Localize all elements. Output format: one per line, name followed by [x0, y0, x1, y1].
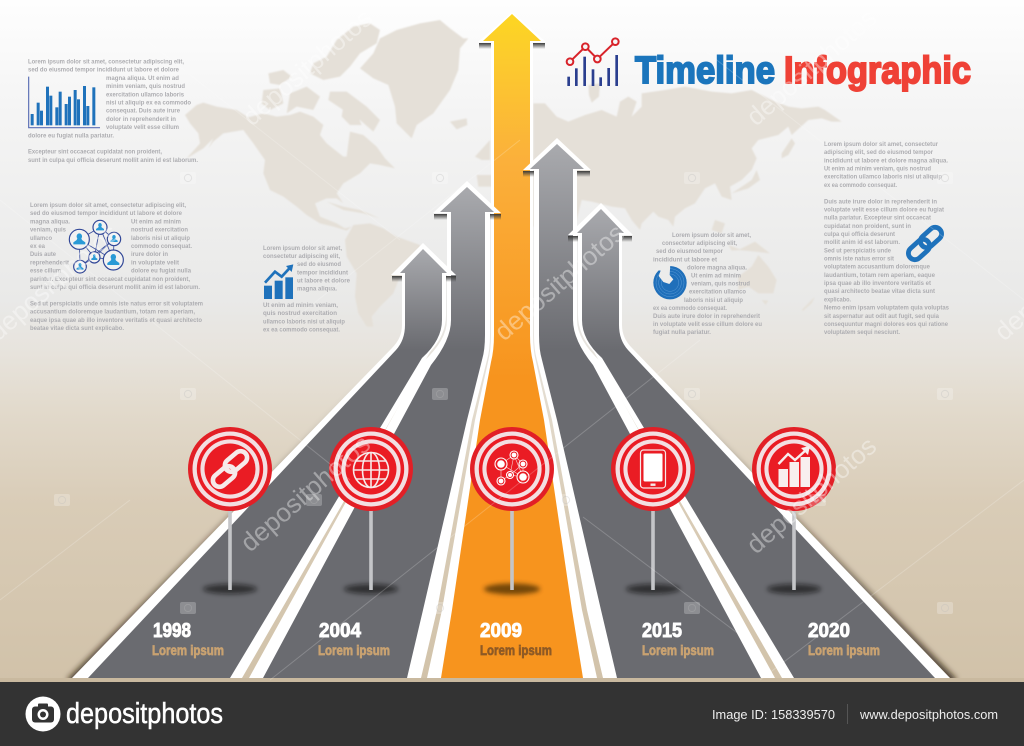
text block: top left: dolor in reprehenderit in: [106, 116, 176, 123]
pole shadow: [767, 584, 821, 594]
text block: right: culpa qui officia deserunt: [824, 231, 896, 238]
watermark: depositphotos: [740, 431, 882, 560]
watermark: depositphotos: [740, 3, 882, 132]
text block: top left: consequat. Duis aute irure: [106, 108, 180, 115]
text block: center left: [263, 245, 350, 334]
text block: middle left: dolore eu fugiat nulla: [131, 268, 191, 275]
text block: top left: minim veniam, quis nostrud: [106, 83, 185, 90]
text block: right: adipiscing elit, sed do eiusmod tempor: [824, 149, 934, 156]
text block: right: sit aspernatur aut odit aut fugit, sed quia: [824, 313, 939, 320]
text block: center left: tempor incididunt: [297, 269, 349, 276]
text block: right: [824, 141, 949, 336]
text block: center right: dolore magna aliqua.: [687, 264, 747, 271]
text block: right: omnis iste natus error sit: [824, 256, 895, 262]
year label 2009: [480, 620, 552, 658]
text block: top left: voluptate velit esse cillum: [106, 124, 179, 131]
text block: center left: ullamco laboris nisi ut aliquip: [263, 318, 345, 325]
text block: center right: exercitation ullamco: [689, 289, 746, 296]
text block: right: incididunt ut labore et dolore magna aliqua.: [824, 157, 948, 164]
text block: center left: consectetur adipiscing elit,: [263, 253, 340, 260]
text block: middle left: Lorem ipsum dolor sit amet, consectetur adipiscing elit,: [30, 202, 186, 209]
pole: [510, 509, 514, 590]
footer bar: [0, 682, 1024, 746]
text block: center right: [653, 232, 762, 336]
text block: middle left: accusantium doloremque laudantium, totam rem aperiam,: [30, 309, 195, 316]
icon: bar chart: [29, 77, 100, 128]
text block: middle left: nostrud exercitation: [131, 227, 188, 234]
text block: right: exercitation ullamco laboris nisi ut aliquip: [824, 174, 942, 181]
text block: middle left: magna aliqua.: [30, 218, 70, 225]
text block: top left: Lorem ipsum dolor sit amet, consectetur adipiscing elit,: [28, 58, 184, 66]
text block: center right: ex ea commodo consequat.: [653, 305, 727, 312]
text block: middle left: beatae vitae dicta sunt explicabo.: [30, 325, 124, 332]
pole shadow: [484, 584, 540, 594]
world map: [185, 20, 842, 327]
icon: chain link: [210, 448, 250, 490]
text block: right: Sed ut perspiciatis unde: [824, 247, 891, 254]
site url: www.depositphotos.com: [859, 707, 998, 722]
text block: right: laudantium, totam rem aperiam, eaque: [824, 272, 935, 279]
title: Infographic: [784, 50, 971, 92]
road 4: grey arrow: [523, 138, 775, 678]
title icon: line and bar chart: [567, 38, 619, 86]
text block: center right: fugiat nulla pariatur.: [653, 329, 711, 336]
text block: center right: consectetur adipiscing elit,: [662, 240, 737, 247]
text block: center left: magna aliqua.: [297, 286, 337, 292]
text block: middle left: [30, 202, 203, 332]
watermark: depositphotos: [488, 218, 630, 347]
text block: middle left: sunt in culpa qui officia deserunt mollit anim id est laborum.: [30, 284, 200, 291]
road 5: grey arrow: [568, 203, 950, 678]
text block: middle left: in voluptate velit: [131, 259, 180, 266]
icon: tablet: [640, 450, 666, 488]
text block: right: Nemo enim ipsam voluptatem quia voluptas: [824, 305, 949, 312]
year label 2015: Lorem ipsum: [642, 642, 714, 658]
year label 2020: Lorem ipsum: [808, 642, 880, 658]
year label 1998: [152, 620, 224, 658]
text block: middle left: sed do eiusmod tempor incididunt ut labore et dolore: [30, 210, 182, 217]
pole: [792, 509, 796, 590]
text block: right: consequuntur magni dolores eos qui ratione: [824, 321, 948, 328]
year label 2004: [318, 620, 390, 658]
year label 2009: Lorem ipsum: [480, 642, 552, 658]
road 2: grey arrow: [249, 181, 501, 678]
text block: top left: sed do eiusmod tempor incididunt ut labore et dolore: [28, 67, 179, 74]
text block: center left: ex ea commodo consequat.: [263, 327, 340, 334]
road side shadows: [64, 414, 960, 678]
text block: right: nulla pariatur. Excepteur sint occaecat: [824, 215, 932, 222]
title: Timeline: [635, 50, 775, 92]
text block: right: voluptate velit esse cillum dolore eu fugiat: [824, 206, 945, 213]
text block: right: Duis aute irure dolor in reprehenderit in: [824, 198, 937, 205]
sign disc: [329, 427, 413, 511]
road bottom edge: [0, 678, 1024, 682]
text block: middle left: Ut enim ad minim: [131, 218, 181, 225]
sign disc: [188, 427, 272, 511]
image id: Image ID: 158339570: [712, 707, 835, 722]
americas and greenland: [185, 20, 492, 327]
text block: middle left: eaque ipsa quae ab illo inventore veritatis et quasi architecto: [30, 317, 202, 324]
text block: center right: in voluptate velit esse cillum dolore eu: [653, 321, 762, 328]
pole: [369, 509, 373, 590]
text block: center right: Lorem ipsum dolor sit amet,: [672, 232, 751, 239]
watermark: depositphotos: [236, 3, 378, 132]
watermark: depositphotos: [234, 429, 376, 558]
text block: middle left: ullamco: [30, 235, 52, 242]
text block: center left: Lorem ipsum dolor sit amet,: [263, 245, 342, 252]
year label 1998: 1998: [153, 620, 191, 642]
text block: center left: quis nostrud exercitation: [263, 310, 337, 317]
text block: center right: veniam, quis nostrud: [691, 281, 750, 288]
pole shadow: [626, 584, 680, 594]
text block: top left: sunt in culpa qui officia deserunt mollit anim id est laborum.: [28, 157, 198, 164]
text block: center left: sed do eiusmod: [297, 261, 341, 268]
sign 2: globe: [329, 427, 413, 594]
text block: middle left: ex ea: [30, 243, 45, 250]
icon: growth bars: [264, 264, 293, 299]
pole: [651, 509, 655, 590]
footer logo icon: [26, 696, 60, 732]
pole: [228, 509, 232, 590]
text block: right: ipsa quae ab illo inventore veritatis et: [824, 280, 932, 287]
sign 1: link: [188, 427, 272, 594]
text block: top left: Excepteur sint occaecat cupidatat non proident,: [28, 149, 162, 156]
footer logo text: depositphotos: [66, 698, 223, 730]
text block: center right: incididunt ut labore et: [653, 256, 718, 263]
icon: globe: [354, 452, 388, 488]
icon: bars and rising arrow: [778, 446, 810, 487]
text block: middle left: irure dolor in: [131, 251, 168, 258]
year label 2020: [808, 620, 880, 658]
year label 1998: Lorem ipsum: [152, 642, 224, 658]
year label 2004: 2004: [319, 620, 362, 642]
text block: top left: nisi ut aliquip ex ea commodo: [106, 100, 191, 106]
sign 5: growth chart: [752, 427, 836, 594]
text block: middle left: commodo consequat.: [131, 243, 192, 250]
eurasia and australia: [533, 83, 842, 311]
icon: radial chart: [653, 263, 687, 299]
text block: top left: exercitation ullamco laboris: [106, 91, 184, 98]
sign 4: tablet: [611, 427, 695, 594]
text block: middle left: laboris nisi ut aliquip: [131, 235, 190, 242]
pole shadow: [344, 584, 398, 594]
road 1: grey arrow: [72, 243, 456, 678]
text block: right: mollit anim id est laborum.: [824, 239, 900, 246]
text block: right: ex ea commodo consequat.: [824, 182, 897, 189]
year label 2020: 2020: [808, 620, 850, 642]
text block: middle left: veniam, quis: [30, 227, 66, 234]
pole shadow: [203, 584, 257, 594]
text block: middle left: esse cillum: [30, 268, 61, 275]
icon: blue chain link: [906, 225, 944, 262]
text block: center right: Duis aute irure dolor in reprehenderit: [653, 313, 761, 320]
text block: middle left: reprehenderit: [30, 259, 70, 266]
sign disc: [611, 427, 695, 511]
sign disc: [752, 427, 836, 511]
text block: middle left: Sed ut perspiciatis unde omnis iste natus error sit voluptatem: [30, 300, 203, 307]
text block: right: Lorem ipsum dolor sit amet, consectetur: [824, 141, 939, 148]
text block: center right: sed do eiusmod tempor: [656, 248, 724, 255]
title: [635, 50, 971, 92]
text block: right: explicabo.: [824, 296, 851, 303]
text block: right: quasi architecto beatae vitae dicta sunt: [824, 288, 936, 295]
road 3: highlighted orange arrow: [427, 12, 597, 678]
text block: middle left: pariatur. Excepteur sint occaecat cupidatat non proident,: [30, 276, 190, 283]
text block: top left: [28, 58, 198, 164]
icon: people network: [495, 451, 529, 485]
text block: right: voluptatem accusantium doloremque: [824, 264, 930, 271]
text block: right: voluptatem sequi nesciunt.: [824, 329, 900, 336]
year label 2004: Lorem ipsum: [318, 642, 390, 658]
text block: center left: Ut enim ad minim veniam,: [263, 302, 338, 309]
text block: right: cupidatat non proident, sunt in: [824, 223, 911, 230]
text block: center left: ut labore et dolore: [297, 277, 350, 284]
sign 3: network: [470, 427, 554, 594]
year label 2009: 2009: [480, 620, 522, 642]
sign disc: [470, 427, 554, 511]
text block: middle left: Duis aute: [30, 251, 56, 258]
icon: people network: [69, 220, 123, 273]
text block: center right: Ut enim ad minim: [691, 272, 741, 280]
text block: center right: laboris nisi ut aliquip: [684, 297, 743, 304]
text block: top left: magna aliqua. Ut enim ad: [106, 75, 179, 82]
year label 2015: 2015: [642, 620, 682, 642]
text block: top left: dolore eu fugiat nulla pariatur.: [28, 132, 114, 139]
text block: right: Ut enim ad minim veniam, quis nostrud: [824, 166, 931, 172]
year label 2015: [642, 620, 714, 658]
